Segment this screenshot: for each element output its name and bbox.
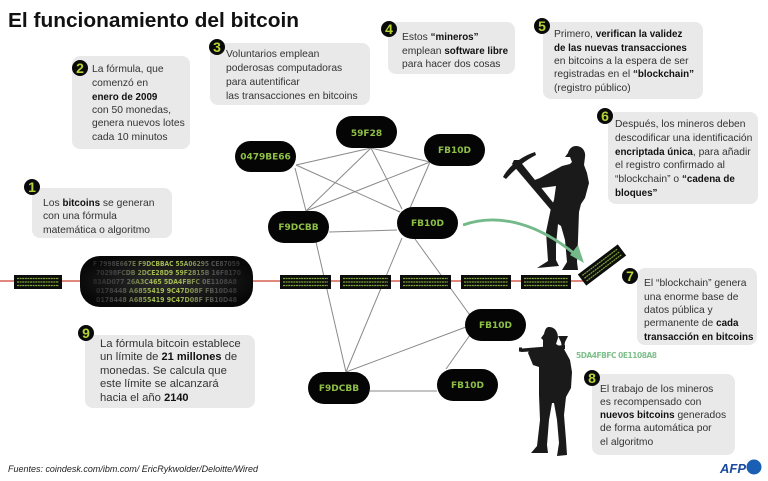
panel: step 9 [78,325,255,408]
AFP logo [719,460,762,476]
panel: step 9: 9 [82,325,90,341]
node FB10D top: FB10D [438,146,471,156]
node F9DCBB bottom: F9DCBB [319,384,359,394]
panel: step 4 [381,21,515,74]
panel: step 1: con una fórmula [43,211,117,222]
panel: step 3: Voluntarios emplean [226,49,320,60]
blockchain red line [0,280,590,282]
network connection lines [295,148,472,391]
panel: step 8 [584,370,735,455]
panel: step 8: el algoritmo [600,437,653,448]
large block with hash text [80,256,253,307]
panel: step 8: nuevos bitcoins generados [600,410,726,421]
large block with hash text: F 7998E667E F9DCBBAC 55A06295 CE87059 [93,259,240,268]
panel: step 1: Los bitcoins se generan [43,198,155,209]
arrow: block to chain [463,220,584,263]
panel: step 1: 1 [28,179,36,195]
panel: step 2: La fórmula, que [92,64,164,75]
large block with hash text: 0178448 A6855419 9C47D08F FB10D48 [96,295,237,304]
panel: step 3: poderosas computadoras [226,63,342,74]
panel: step 5: 5 [538,18,546,34]
node 59F28: 59F28 [351,129,382,139]
panel: step 3 [209,39,370,105]
small block 3 [340,275,391,289]
panel: step 2: 2 [76,60,84,76]
node FB10D top [424,134,485,166]
panel: step 7: transacción en bitcoins [644,332,754,343]
AFP logo: AFP [719,461,746,476]
panel: step 8: es recompensado con [600,397,702,408]
panel: step 3: las transacciones en bitcoins [226,91,358,102]
panel: step 1 [24,179,172,238]
panel: step 5: Primero, verifican la validez [554,29,682,40]
small block 2 [280,275,331,289]
panel: step 2: enero de 2009 [92,92,158,103]
node FB10D centre [397,207,458,239]
node FB10D bottom [437,369,498,401]
panel: step 4: emplean software libre [402,46,509,57]
panel: step 5 [534,18,703,99]
large block with hash text: 83AD077 26A3C465 5DA4FBFC 0E1108A8 [93,277,237,286]
panel: step 5: (registro público) [554,83,631,94]
panel: step 9: La fórmula bitcoin establece [100,338,241,350]
node 0479BE66: 0479BE66 [240,152,291,162]
panel: step 6: encriptada única, para añadir [615,147,751,158]
panel: step 7: una enorme base de [644,292,739,303]
panel: step 7: El “blockchain” genera [644,278,747,289]
panel: step 9: monedas. Se calcula que [100,365,227,377]
panel: step 7: 7 [626,268,634,284]
large block with hash text: 70298FCDB 2DCE28D9 59F2815B 16F8170 [96,268,241,277]
panel: step 7: permanente de cada [644,318,739,329]
panel: step 6: bloques” [615,188,658,199]
panel: step 7 [622,268,757,345]
node FB10D right [465,309,526,341]
panel: step 4: para hacer dos cosas [402,59,500,70]
small block 6 [521,275,571,289]
panel: step 9: este límite se alcanzará [100,378,219,390]
node F9DCBB left [268,211,329,243]
panel: step 5: registradas en el “blockchain” [554,69,694,80]
panel: step 1: matemática o algoritmo [43,225,150,236]
small block 4 [400,275,451,289]
icon: miner with pickaxe [503,146,589,270]
node FB10D bottom: FB10D [451,381,484,391]
source credit: Fuentes: coindesk.com/ibm.com/ EricRykwolder/Deloitte/Wired [8,464,259,475]
panel: step 2: genera nuevos lotes [92,118,185,129]
small block 5 [461,275,511,289]
large block with hash text: 0178448 A6855419 9C47D08F FB10D48 [96,286,237,295]
panel: step 4: Estos “mineros” [402,32,479,43]
node FB10D centre: FB10D [411,219,444,229]
panel: step 9: hacia el año 2140 [100,392,189,404]
panel: step 2 [72,56,190,149]
panel: step 8: 8 [588,370,596,386]
panel: step 4: 4 [385,21,393,37]
title: El funcionamiento del bitcoin [8,9,299,32]
panel: step 6: “blockchain” o “cadena de [615,174,735,185]
node 0479BE66 [235,141,296,172]
panel: step 6: el registro confirmado al [615,160,725,171]
panel: step 5: en bitcoins a la espera de ser [554,56,689,67]
node F9DCBB bottom [308,372,370,404]
panel: step 8: de forma automática por [600,423,712,434]
panel: step 7: datos pública y [644,305,714,316]
icon: miner with tool on shoulder [519,327,572,456]
panel: step 8: El trabajo de los mineros [600,384,713,395]
small block 1 [14,275,62,289]
hash label: 5DA4FBFC 0E1108A8 [576,351,657,360]
panel: step 2: cada 10 minutos [92,132,168,143]
panel: step 2: comenzó en [92,78,148,89]
panel: step 5: de las nuevas transacciones [554,43,687,54]
panel: step 2: con 50 monedas, [92,105,171,116]
panel: step 9: un límite de 21 millones de [100,351,237,363]
node FB10D right: FB10D [479,321,512,331]
panel: step 6: 6 [601,108,609,124]
panel: step 3: 3 [213,39,221,55]
tilted block being added [578,244,626,286]
panel: step 6: descodificar una identificación [615,133,753,144]
panel: step 3: para autentificar [226,77,300,88]
node 59F28 [336,116,397,148]
node F9DCBB left: F9DCBB [278,223,319,233]
panel: step 6: Después, los mineros deben [615,119,746,130]
panel: step 6 [597,108,758,204]
